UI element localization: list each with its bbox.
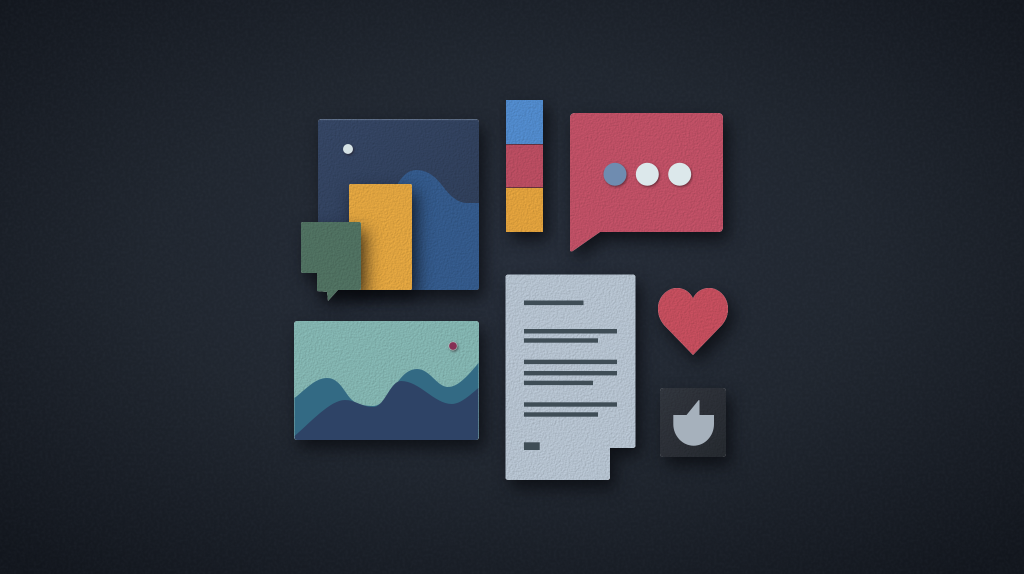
white dot xyxy=(636,163,659,186)
icon: dark tile with drop glyph xyxy=(660,388,726,457)
blue dot xyxy=(604,163,626,186)
paper sheet xyxy=(506,274,636,480)
glyph xyxy=(673,400,714,446)
navy picture card xyxy=(318,119,479,290)
bubble shape xyxy=(570,113,723,251)
teal card xyxy=(294,321,479,440)
yellow swatch xyxy=(506,188,543,232)
dark wave xyxy=(294,381,478,440)
green speech bubble xyxy=(301,222,361,301)
yellow bar xyxy=(349,184,412,290)
text lines xyxy=(524,300,617,450)
panel: document page xyxy=(506,274,636,480)
icon: red heart xyxy=(658,288,728,355)
panel: landscape card xyxy=(294,321,479,440)
red dot xyxy=(449,342,457,350)
panel: picture card with bars and speech bubble xyxy=(301,119,479,301)
panel: colour swatch stack xyxy=(506,100,543,232)
blue swatch xyxy=(506,100,543,144)
tile xyxy=(660,388,726,457)
red swatch xyxy=(506,144,543,188)
panel: red chat bubble xyxy=(570,113,723,251)
white dot xyxy=(668,163,691,186)
mid wave xyxy=(294,363,478,436)
white dot xyxy=(343,144,353,154)
